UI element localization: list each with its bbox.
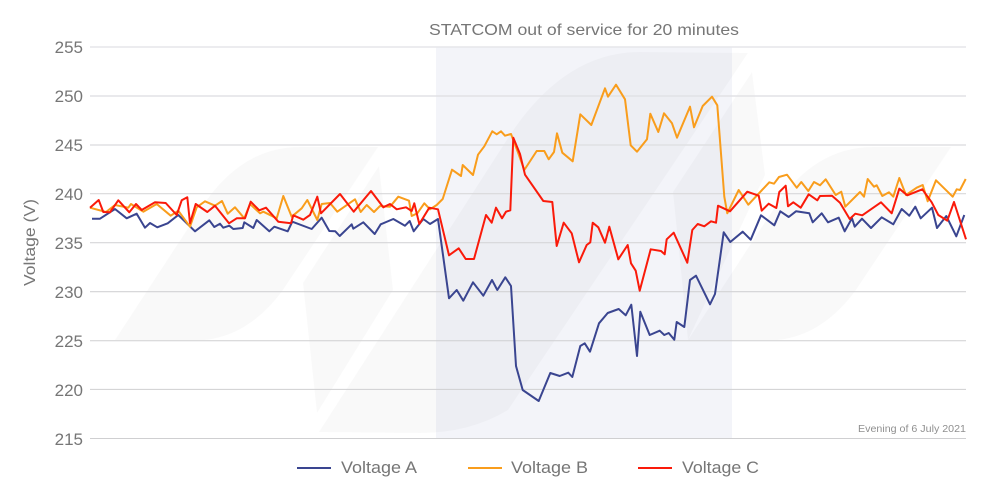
series: Voltage C (90, 138, 966, 291)
y-axis tick labels: 250 (55, 87, 83, 106)
legend item: Voltage B: Voltage B (511, 458, 588, 477)
series: Voltage A (92, 207, 964, 401)
legend item: Voltage A: Voltage A (341, 458, 418, 477)
y-axis tick labels: 215 (55, 430, 83, 449)
y-axis tick labels: 220 (55, 381, 83, 400)
legend item: Voltage A (297, 458, 418, 477)
y-axis tick labels: 240 (55, 185, 83, 204)
y-axis tick labels: 255 (55, 38, 83, 57)
y-axis tick labels: 235 (55, 234, 83, 253)
legend item: Voltage B (468, 458, 588, 477)
legend item: Voltage C: Voltage C (682, 458, 759, 477)
y-axis tick labels: 245 (55, 136, 83, 155)
caption: date note: Evening of 6 July 2021 (858, 423, 966, 435)
y-axis tick labels: 230 (55, 283, 83, 302)
legend item: Voltage C (638, 458, 759, 477)
shaded band: STATCOM out of service period (436, 47, 732, 439)
title: STATCOM out of service for 20 minutes (429, 22, 739, 39)
y-axis tick labels: 225 (55, 332, 83, 351)
legend (297, 458, 759, 477)
series: Voltage B (90, 85, 966, 227)
y-axis title: Voltage (V) (22, 199, 39, 286)
y-axis tick labels (55, 38, 83, 449)
